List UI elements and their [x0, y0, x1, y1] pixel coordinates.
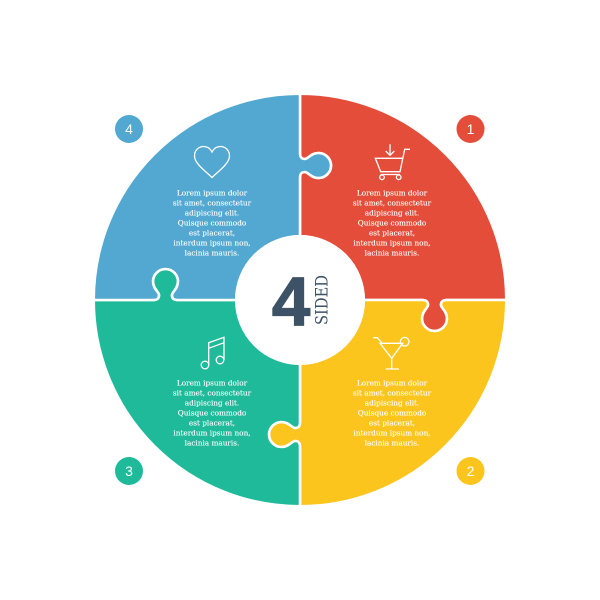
- text: red panel: sit amet, consectetur: [353, 198, 432, 208]
- text: green panel: sit amet, consectetur: [173, 388, 252, 398]
- text: green panel: adipiscing elit.: [185, 398, 239, 408]
- text: green panel: [173, 378, 252, 448]
- text: yellow panel: lacinia mauris.: [365, 438, 419, 448]
- label: SIDED: SIDED: [312, 275, 332, 325]
- badge 2: 2: [467, 463, 475, 479]
- puzzle piece: blue: [94, 94, 331, 300]
- text: green panel: interdum ipsum non,: [173, 428, 251, 438]
- text: red panel: interdum ipsum non,: [353, 238, 431, 248]
- text: yellow panel: adipiscing elit.: [365, 398, 419, 408]
- text: green panel: lacinia mauris.: [185, 438, 239, 448]
- text: blue panel: Quisque commodo: [178, 218, 247, 228]
- badge 3: [115, 457, 143, 485]
- text: yellow panel: interdum ipsum non,: [353, 428, 431, 438]
- icon: music notes: [201, 337, 224, 369]
- text: blue panel: interdum ipsum non,: [173, 238, 251, 248]
- text: blue panel: Lorem ipsum dolor: [177, 188, 248, 198]
- badge 1: 1: [467, 121, 475, 137]
- icon: cocktail glass: [373, 337, 409, 369]
- center circle: [235, 235, 365, 365]
- text: red panel: [353, 188, 432, 258]
- badge 4: 4: [125, 121, 133, 137]
- text: blue panel: adipiscing elit.: [185, 208, 239, 218]
- icon: shopping cart: [375, 144, 410, 180]
- badge 3: 3: [125, 463, 133, 479]
- puzzle piece: red: [300, 94, 506, 331]
- badge 2: [456, 457, 484, 485]
- text: red panel: lacinia mauris.: [365, 248, 419, 258]
- text: blue panel: [173, 188, 252, 258]
- text: yellow panel: [353, 378, 432, 448]
- puzzle piece: green: [94, 269, 300, 506]
- text: red panel: adipiscing elit.: [365, 208, 419, 218]
- text: yellow panel: Lorem ipsum dolor: [357, 378, 428, 388]
- text: red panel: est placerat,: [369, 228, 415, 238]
- puzzle piece: yellow: [269, 300, 506, 506]
- text: yellow panel: est placerat,: [369, 418, 415, 428]
- text: blue panel: est placerat,: [189, 228, 235, 238]
- text: blue panel: sit amet, consectetur: [173, 198, 252, 208]
- text: blue panel: lacinia mauris.: [185, 248, 239, 258]
- text: green panel: Quisque commodo: [178, 408, 247, 418]
- icon: heart: [194, 146, 230, 178]
- numeral 4: 4: [272, 263, 310, 340]
- badge 1: [456, 115, 484, 143]
- text: green panel: Lorem ipsum dolor: [177, 378, 248, 388]
- text: yellow panel: Quisque commodo: [358, 408, 427, 418]
- text: yellow panel: sit amet, consectetur: [353, 388, 432, 398]
- badge 4: [115, 115, 143, 143]
- text: red panel: Quisque commodo: [358, 218, 427, 228]
- text: green panel: est placerat,: [189, 418, 235, 428]
- text: red panel: Lorem ipsum dolor: [357, 188, 428, 198]
